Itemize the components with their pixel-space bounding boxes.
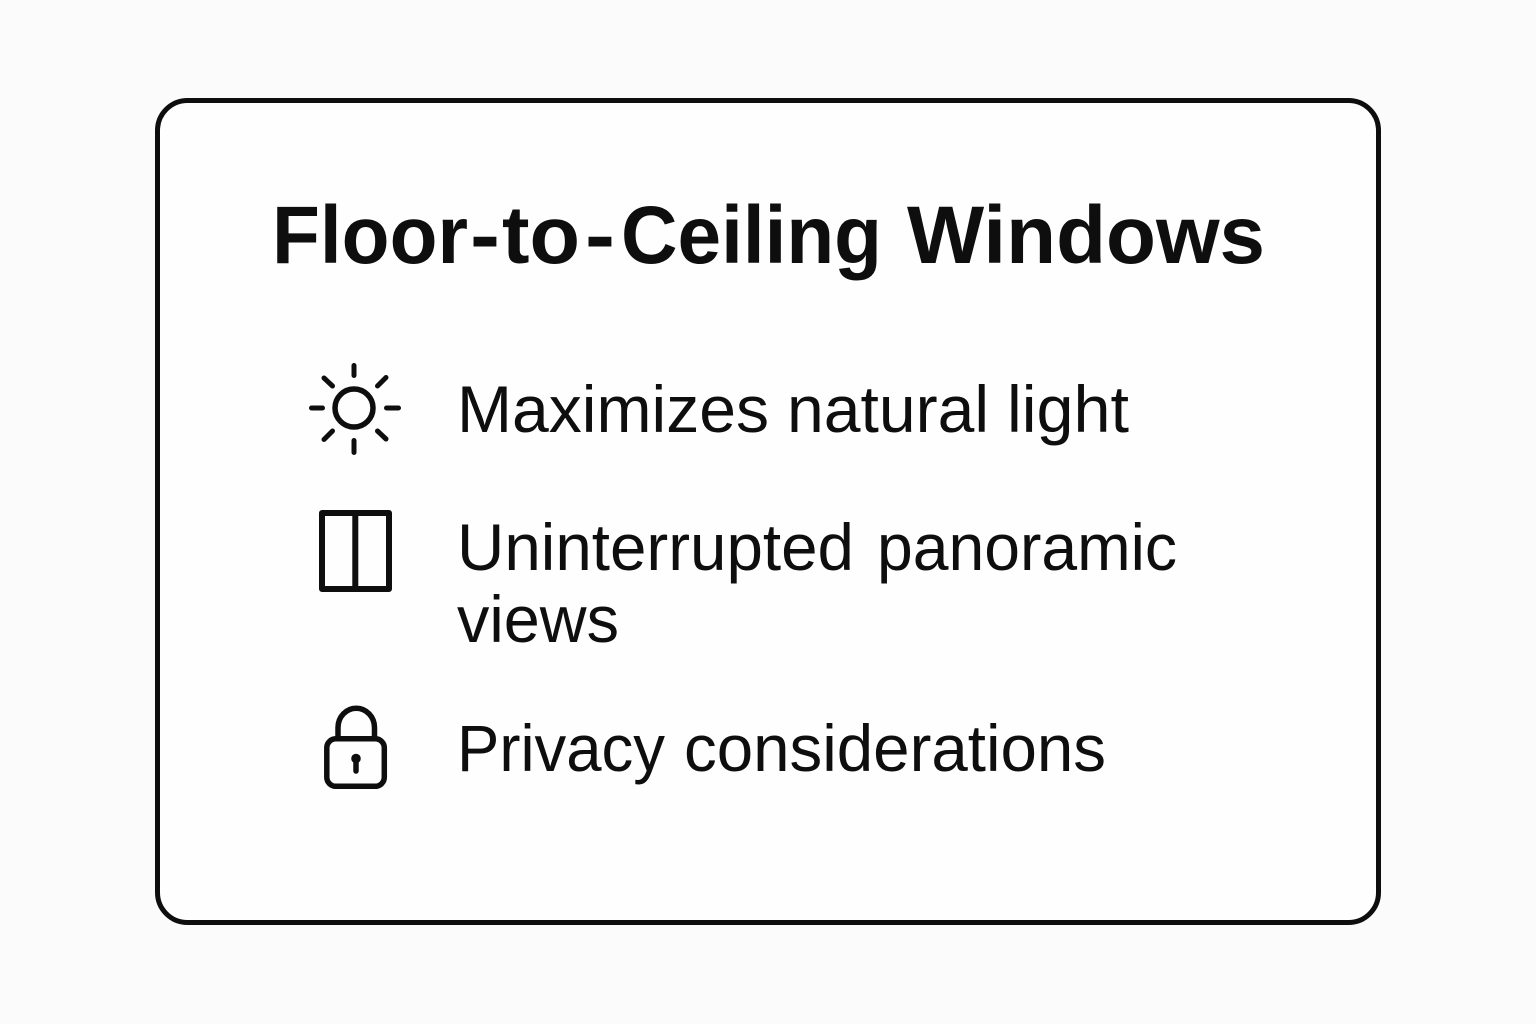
icon: sun	[312, 366, 398, 452]
icon: window	[322, 513, 389, 589]
text: panoramic views: views	[457, 582, 619, 656]
text: natural light: light	[1007, 372, 1129, 446]
title: -	[470, 190, 500, 281]
icon: padlock	[327, 708, 384, 786]
text: privacy: considerations	[684, 711, 1106, 785]
text: natural light: Maximizes	[457, 372, 769, 446]
text: panoramic views: panoramic	[877, 510, 1177, 584]
title: Floor	[272, 190, 468, 281]
panel: card	[158, 100, 1378, 922]
text: panoramic views: Uninterrupted	[457, 510, 854, 584]
text: privacy: Privacy	[457, 711, 665, 785]
text: natural light: natural	[787, 372, 989, 446]
title: to	[502, 190, 580, 281]
title: -	[585, 190, 615, 281]
title: Ceiling	[621, 190, 882, 281]
text: panoramic views	[457, 510, 1177, 656]
title: Windows	[907, 190, 1265, 281]
